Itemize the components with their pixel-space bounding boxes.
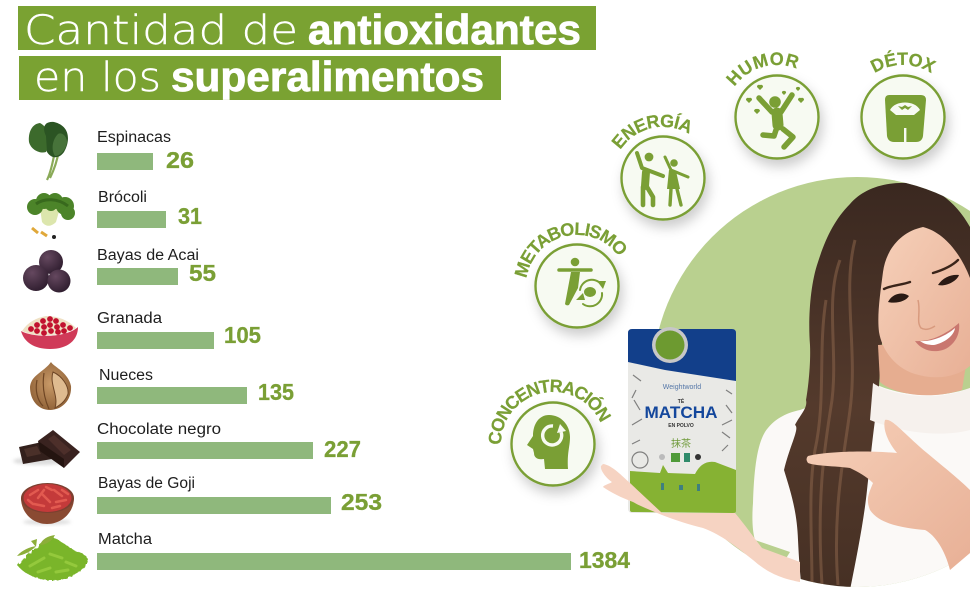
pouch benefit icons: [661, 483, 700, 491]
icon: goji berries in bowl: [21, 483, 74, 525]
bar: Brócoli 31: 31: [178, 203, 202, 229]
holding hand and forearm: [601, 464, 800, 582]
woman: hair highlights: [811, 240, 855, 585]
bar: Matcha 1384: [97, 531, 630, 573]
woman: smile: [915, 323, 959, 351]
icon: dancing people: [637, 153, 688, 205]
icon: jumping person with hearts: [746, 85, 804, 147]
icon: dark chocolate: [13, 430, 80, 468]
pouch label: Té: TÉ: [678, 397, 685, 405]
bar: Bayas de Acai 55: Bayas de Acai: [97, 247, 199, 264]
bar: Chocolate negro 227: Chocolate negro: [97, 421, 221, 438]
icon: pomegranate: [21, 316, 78, 349]
pouch lid window: [652, 327, 688, 363]
icon: walnut: [30, 362, 71, 410]
bar: Brócoli 31: Brócoli: [98, 189, 147, 206]
title line 1: antioxidantes: [308, 6, 581, 53]
icon badge: Humor: [726, 52, 828, 172]
icon: weighing scale: [885, 95, 926, 142]
woman: neck: [878, 340, 970, 395]
bar: Matcha 1384: 1384: [579, 547, 630, 573]
bar: Bayas de Goji 253: Bayas de Goji: [98, 475, 195, 492]
bar: Bayas de Goji 253: 253: [341, 489, 382, 515]
woman: shirt: [752, 383, 970, 600]
pouch label: kanji: 抹茶: [671, 437, 691, 450]
woman pointing at the product: [752, 183, 970, 600]
icon badge: Détox: [858, 50, 954, 172]
bar: Bayas de Acai 55: 55: [189, 260, 216, 286]
label: Détox: DÉTOX: [870, 50, 937, 74]
bar: Espinacas 26: [97, 129, 194, 173]
label: Humor: HUMOR: [726, 52, 799, 86]
green background circle: [652, 177, 970, 587]
pouch brand: Weightworld: [663, 384, 701, 391]
bar: Bayas de Goji 253: [97, 475, 382, 515]
bar: Espinacas 26: Espinacas: [97, 129, 171, 146]
woman: collar: [870, 383, 970, 434]
pouch label: Matcha: MATCHA: [644, 403, 718, 422]
pouch body: [628, 329, 736, 513]
woman: pointing hand: [806, 420, 970, 570]
label: Energía: ENERGÍA: [611, 113, 690, 150]
bar: Nueces 135: Nueces: [99, 367, 153, 384]
title line 2: en los: [34, 55, 161, 101]
icon: figure with metabolic cycle: [559, 258, 606, 306]
label: Metabolismo: METABOLISMO: [514, 222, 626, 278]
icon: matcha powder: [17, 535, 88, 580]
woman: hair: [784, 183, 970, 590]
pouch illustrations: [632, 375, 732, 468]
bar: Nueces 135: [97, 367, 294, 405]
bar: Chocolate negro 227: [97, 421, 361, 462]
icon: spinach: [29, 122, 68, 180]
bar: Bayas de Acai 55: [97, 247, 216, 286]
bar: Espinacas 26: 26: [166, 147, 194, 173]
bar chart: antioxidants by food: [97, 129, 630, 573]
bar: Chocolate negro 227: 227: [324, 436, 361, 462]
bar: Granada 105: [97, 310, 261, 349]
bar: Granada 105: 105: [224, 322, 261, 348]
bar: Matcha 1384: Matcha: [98, 531, 152, 548]
woman: eyebrows and eyes: [884, 260, 959, 329]
pouch blue top: [628, 329, 736, 381]
icon: head with circular arrow: [527, 415, 570, 469]
icon badge: Metabolismo: [514, 222, 628, 341]
icon: broccoli: [27, 193, 75, 239]
title line 1: Cantidad de: [24, 8, 298, 54]
icon: acai berries: [23, 250, 70, 292]
pouch green base: [630, 462, 736, 513]
label: Concentración: CONCENTRACIÓN: [488, 379, 612, 444]
title line 2: superalimentos: [171, 53, 484, 100]
bar: Brócoli 31: [97, 189, 202, 229]
title: [18, 6, 596, 101]
pouch label: En polvo: EN POLVO: [668, 423, 694, 429]
bar: Granada 105: Granada: [97, 310, 162, 327]
title line 1: [18, 6, 596, 54]
icon badge: Energía: [611, 113, 714, 233]
woman: face: [878, 227, 970, 377]
product: Matcha pouch: [628, 327, 736, 513]
pouch certifications: [659, 453, 701, 462]
icon badge: Concentración: [488, 379, 612, 499]
woman: teeth: [920, 328, 955, 345]
bar: Nueces 135: 135: [258, 379, 294, 405]
title line 2: [19, 53, 501, 101]
